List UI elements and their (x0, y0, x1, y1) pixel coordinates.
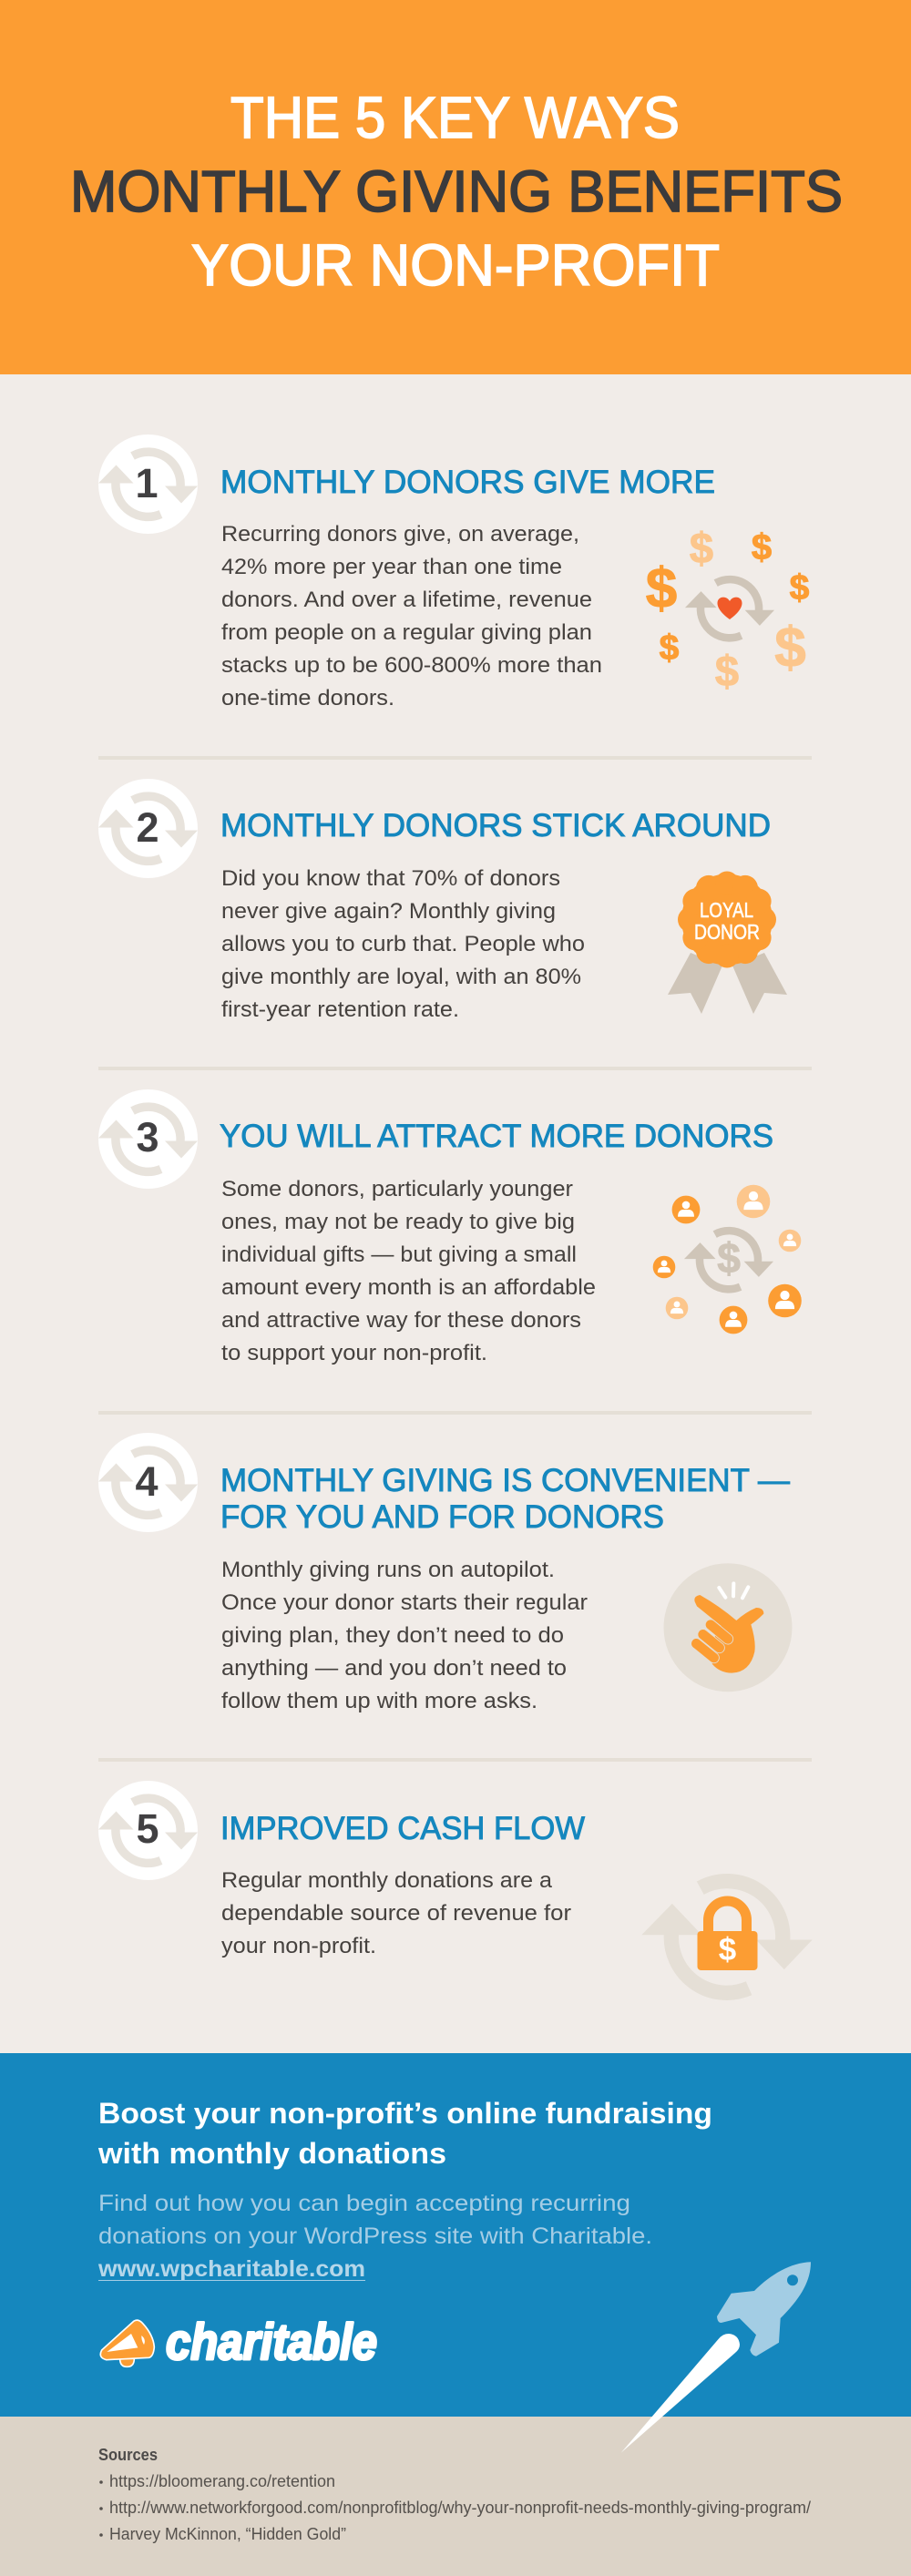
body text 5 (221, 1868, 571, 1958)
charitable logo (100, 2313, 377, 2370)
number badge 1 (98, 434, 198, 534)
panel: section 2 monthly donors stick around (98, 779, 787, 1022)
number badge 3: 3 (136, 1114, 159, 1160)
icon: donors around dollar: $ (717, 1234, 741, 1282)
panel: section 3 you will attract more donors (98, 1089, 802, 1365)
sources list: https://bloomerang.co/retention (109, 2472, 335, 2490)
icon: donors around dollar (653, 1185, 802, 1334)
sources heading: Sources (98, 2446, 158, 2464)
number badge 5 (98, 1781, 198, 1880)
panel: section 5 improved cash flow (98, 1781, 813, 1993)
icon: loyal donor ribbon badge: LOYAL (700, 898, 753, 922)
title: THE 5 KEY WAYS (230, 85, 680, 150)
number badge 2: 2 (136, 804, 159, 851)
body text 2 (221, 866, 585, 1022)
title: MONTHLY GIVING BENEFITS (70, 158, 843, 224)
body text 2: give monthly are loyal, with an 80% (221, 965, 581, 989)
icon: dollars around heart: $ (790, 568, 810, 608)
icon: dollars around heart: $ (715, 647, 739, 695)
body text 3: ones, may not be ready to give big (221, 1210, 575, 1234)
heading 4: FOR YOU AND FOR DONORS (220, 1499, 664, 1535)
icon: dollars around heart: $ (752, 527, 772, 567)
icon: rocket with white trail (621, 2262, 811, 2453)
body text 4: giving plan, they don’t need to do (221, 1623, 564, 1648)
icon: dollars around heart: $ (690, 524, 713, 572)
body text 3: to support your non-profit. (221, 1341, 487, 1365)
cta body text (98, 2191, 652, 2249)
number badge 4 (98, 1433, 198, 1532)
body text 1: Recurring donors give, on average, (221, 522, 579, 547)
body text 5: your non-profit. (221, 1934, 376, 1958)
heading 4 (220, 1463, 790, 1535)
body text 3 (221, 1177, 596, 1365)
body text 1: 42% more per year than one time (221, 555, 562, 579)
title (70, 85, 843, 298)
heading 3: YOU WILL ATTRACT MORE DONORS (220, 1119, 773, 1154)
body text 1: stacks up to be 600-800% more than (221, 653, 602, 678)
heading 1: MONTHLY DONORS GIVE MORE (220, 465, 715, 500)
title: YOUR NON-PROFIT (191, 232, 720, 298)
icon: dollars around heart: $ (660, 629, 680, 668)
panel: section 4 monthly giving is convenient (98, 1433, 793, 1713)
icon: padlock with dollar and cycle arrows: $ (719, 1932, 736, 1968)
icon: finger snap hand (663, 1563, 793, 1692)
number badge 5: 5 (136, 1805, 159, 1852)
body text 4: Once your donor starts their regular (221, 1590, 588, 1615)
body text 4: follow them up with more asks. (221, 1689, 537, 1713)
cta heading: Boost your non-profit’s online fundraising (98, 2097, 712, 2130)
cta heading (97, 2097, 712, 2170)
cta body text: donations on your WordPress site with Charitable. (98, 2223, 652, 2249)
body text 3: individual gifts — but giving a small (221, 1242, 577, 1267)
body text 3: and attractive way for these donors (221, 1308, 581, 1333)
body text 4 (221, 1558, 588, 1713)
body text 2: allows you to curb that. People who (221, 932, 585, 956)
body text 1: donors. And over a lifetime, revenue (221, 588, 592, 612)
body text 4: anything — and you don’t need to (221, 1656, 567, 1681)
icon: dollars around heart (646, 524, 810, 695)
body text 5: Regular monthly donations are a (221, 1868, 553, 1893)
cta link: www.wpcharitable.com (97, 2256, 365, 2282)
sources list (99, 2472, 811, 2543)
cta body text: Find out how you can begin accepting recurring (98, 2191, 630, 2216)
sources list: http://www.networkforgood.com/nonprofitblog/why-your-nonprofit-needs-monthly-giving-program/ (109, 2499, 811, 2517)
number badge 2 (98, 779, 198, 878)
icon: dollars around heart: $ (774, 617, 806, 680)
body text 2: Did you know that 70% of donors (221, 866, 560, 891)
cta heading: with monthly donations (97, 2137, 446, 2170)
number badge 1: 1 (135, 460, 159, 506)
body text 1: from people on a regular giving plan (221, 620, 592, 645)
body text 3: amount every month is an affordable (221, 1275, 596, 1300)
body text 3: Some donors, particularly younger (221, 1177, 573, 1201)
body text 4: Monthly giving runs on autopilot. (221, 1558, 555, 1582)
number badge 3 (98, 1089, 198, 1189)
icon: dollars around heart: $ (646, 557, 677, 620)
heading 5: IMPROVED CASH FLOW (220, 1811, 585, 1846)
panel: sources (0, 2417, 911, 2576)
header band (0, 0, 911, 374)
heading 4: MONTHLY GIVING IS CONVENIENT — (220, 1463, 790, 1498)
icon: padlock with dollar and cycle arrows (641, 1881, 813, 1993)
body text 2: never give again? Monthly giving (221, 899, 556, 924)
number badge 4: 4 (135, 1458, 159, 1505)
charitable logo: charitable (166, 2313, 377, 2370)
body text 5: dependable source of revenue for (221, 1901, 571, 1926)
panel: call to action (0, 2053, 911, 2417)
body text 2: first-year retention rate. (221, 997, 459, 1022)
heading 2: MONTHLY DONORS STICK AROUND (220, 808, 771, 843)
panel: section 1 monthly donors give more (98, 434, 810, 710)
sources list: Harvey McKinnon, “Hidden Gold” (109, 2525, 346, 2543)
icon: megaphone (100, 2320, 154, 2366)
icon: loyal donor ribbon badge: DONOR (694, 920, 760, 944)
icon: loyal donor ribbon badge (668, 871, 787, 1014)
body text 1: one-time donors. (221, 686, 394, 710)
body text 1 (221, 522, 602, 710)
